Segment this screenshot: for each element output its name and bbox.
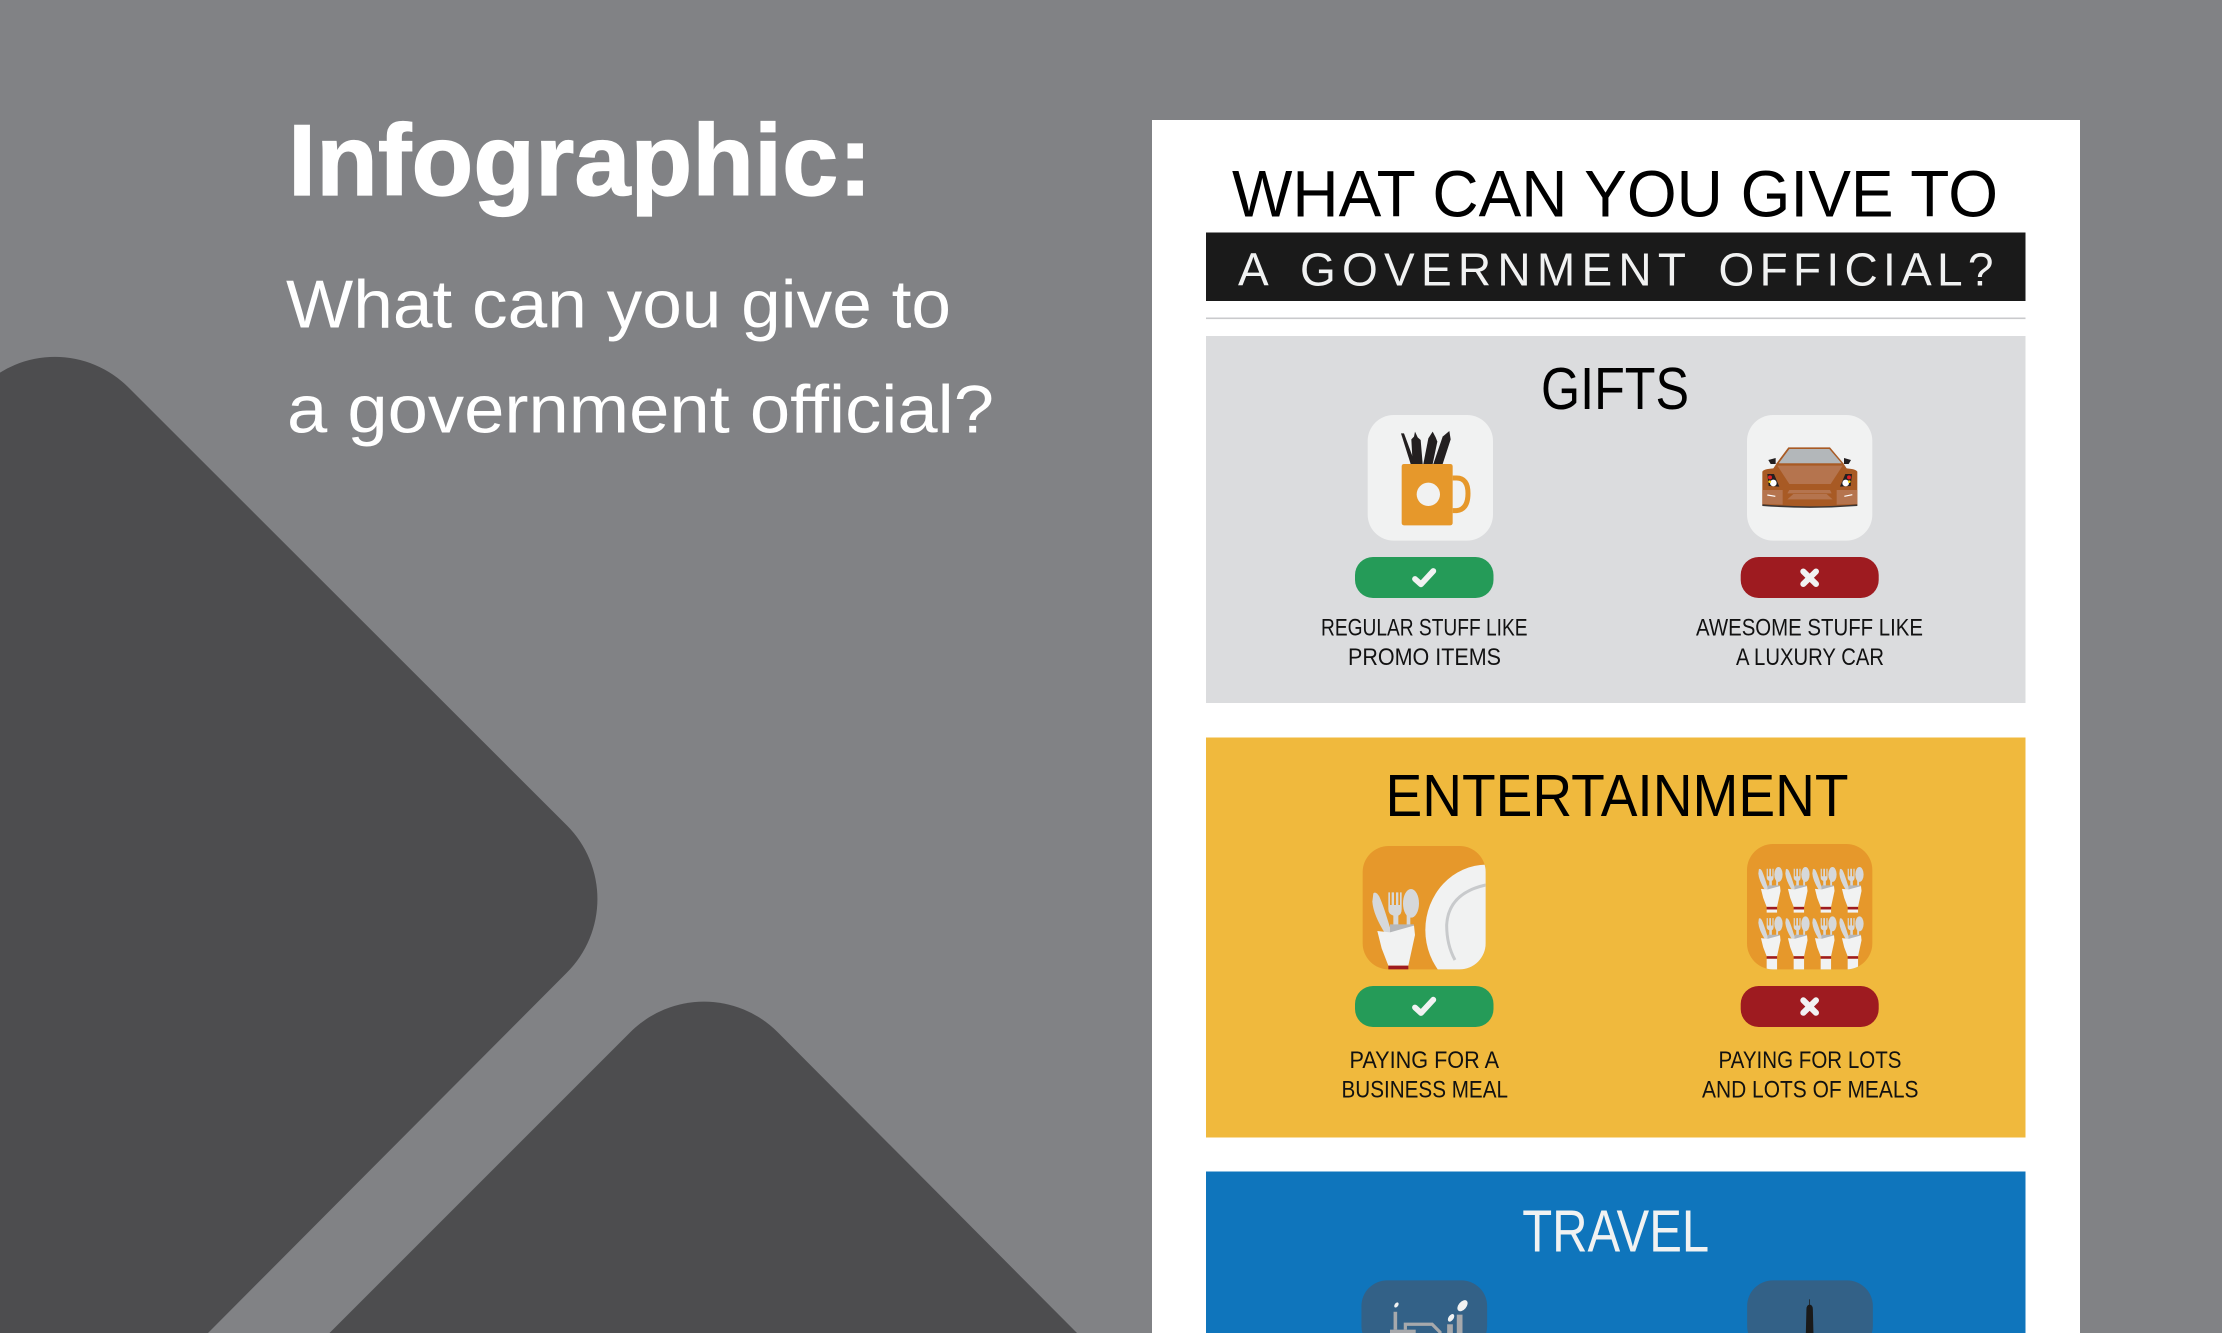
panel: entertainment bbox=[1206, 738, 2026, 1138]
decorative shape: lower rounded diamond bbox=[330, 1002, 1077, 1333]
label: awesome stuff bbox=[1696, 615, 1923, 671]
icon: tower bbox=[1747, 1280, 1873, 1333]
subheading line 2: a government official? bbox=[287, 372, 994, 448]
panel: gifts bbox=[1206, 336, 2026, 703]
label: business meal bbox=[1342, 1047, 1508, 1104]
poster subtitle banner bbox=[1206, 232, 2026, 301]
label: regular stuff bbox=[1321, 615, 1528, 671]
poster title: WHAT CAN YOU GIVE TO bbox=[1232, 157, 1998, 231]
label: lots of meals bbox=[1702, 1047, 1918, 1104]
banner text: OFFICIAL? bbox=[1718, 244, 1994, 296]
heading: entertainment: ENTERTAINMENT bbox=[1386, 763, 1848, 829]
heading: Infographic: Infographic: bbox=[288, 105, 872, 217]
badge: not allowed bbox=[1741, 557, 1879, 598]
travel background bbox=[1206, 1172, 2026, 1333]
label: regular stuff: PROMO ITEMS bbox=[1348, 644, 1501, 671]
badge: allowed bbox=[1355, 986, 1494, 1027]
icon: orange luxury car bbox=[1747, 415, 1872, 541]
label: lots of meals: AND LOTS OF MEALS bbox=[1702, 1076, 1918, 1104]
badge: allowed bbox=[1355, 557, 1494, 598]
icon: factory bbox=[1361, 1280, 1487, 1333]
label: business meal: BUSINESS MEAL bbox=[1342, 1076, 1508, 1104]
label: awesome stuff: AWESOME STUFF LIKE bbox=[1696, 615, 1923, 642]
banner background bbox=[1206, 232, 2026, 301]
heading: gifts: GIFTS bbox=[1541, 356, 1689, 422]
gifts background bbox=[1206, 336, 2026, 703]
decorative shape: large rounded diamond bbox=[0, 357, 597, 1333]
label: lots of meals: PAYING FOR LOTS bbox=[1718, 1047, 1902, 1074]
panel: white infographic card bbox=[1152, 120, 2080, 1333]
heading: travel: TRAVEL bbox=[1522, 1198, 1709, 1264]
heading block bbox=[286, 105, 994, 448]
entertainment background bbox=[1206, 738, 2026, 1138]
label: awesome stuff: A LUXURY CAR bbox=[1736, 644, 1884, 671]
icon: mug with pens bbox=[1368, 415, 1493, 541]
label: regular stuff: REGULAR STUFF LIKE bbox=[1321, 615, 1528, 642]
subheading line 1: What can you give to bbox=[286, 266, 951, 342]
banner text: A bbox=[1238, 244, 1269, 296]
card background bbox=[1152, 120, 2080, 1333]
icon: plate and cutlery bbox=[1362, 846, 1486, 970]
label: business meal: PAYING FOR A bbox=[1350, 1047, 1499, 1074]
icon: many place settings bbox=[1747, 844, 1872, 970]
badge: not allowed bbox=[1741, 986, 1879, 1027]
banner text: GOVERNMENT bbox=[1300, 244, 1686, 296]
panel: travel bbox=[1206, 1172, 2026, 1333]
